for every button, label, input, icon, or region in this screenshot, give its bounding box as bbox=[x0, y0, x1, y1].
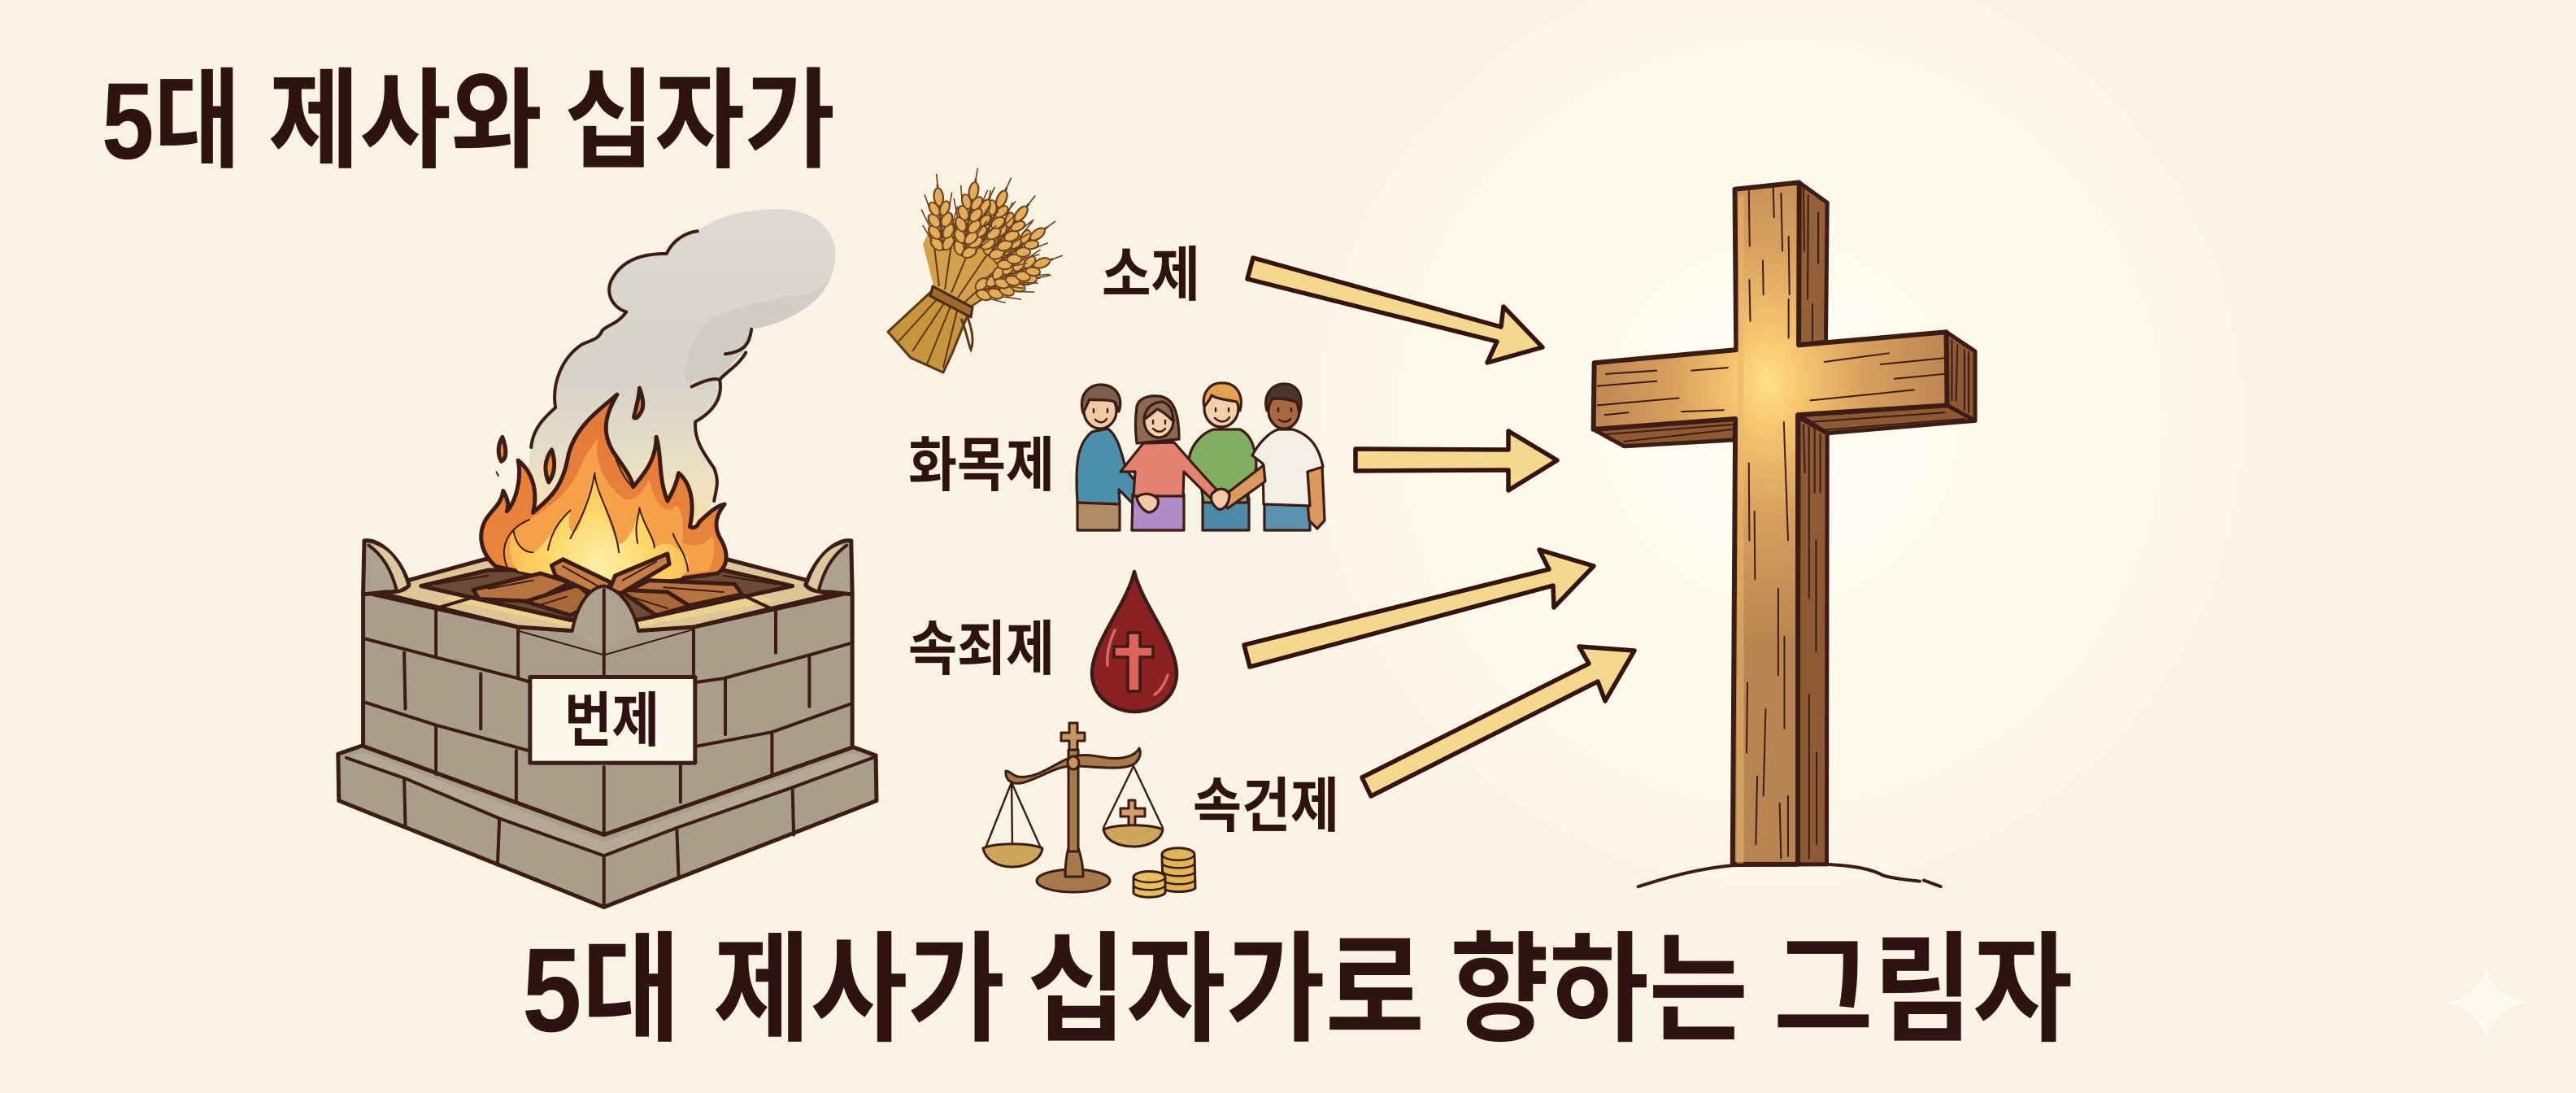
altar illustration: burnt offering bbox=[338, 209, 877, 907]
title: 십자가 bbox=[564, 61, 835, 182]
wheat tie bbox=[930, 286, 973, 317]
bottom caption: 제사가 bbox=[713, 924, 1005, 1057]
front face bbox=[1594, 182, 1947, 864]
title: 5대 bbox=[102, 61, 241, 182]
front horn bbox=[572, 586, 638, 653]
label: 속건제: 속건제 bbox=[1193, 773, 1339, 839]
arrow: 속죄제 to cross bbox=[1244, 550, 1594, 667]
ground line bbox=[1638, 864, 1941, 886]
wheat stems bbox=[888, 220, 1025, 372]
label box bbox=[530, 677, 695, 763]
wood grain lines bbox=[1598, 189, 1969, 859]
person 2 bbox=[1120, 396, 1218, 530]
base slab bbox=[338, 745, 877, 907]
bottom caption: 그림자 bbox=[1773, 924, 2073, 1057]
icon: balance scale with coins bbox=[983, 723, 1195, 897]
bottom caption bbox=[522, 924, 2073, 1057]
altar body bbox=[363, 592, 852, 834]
label: 속죄제: 속죄제 bbox=[908, 616, 1055, 682]
arrow: 속건제 to cross bbox=[1362, 647, 1634, 796]
label: 화목제: 화목제 bbox=[908, 433, 1055, 499]
altar rim and pit bbox=[371, 560, 846, 631]
coins bbox=[1134, 848, 1195, 897]
sparkle watermark bbox=[2446, 964, 2526, 1042]
label: 소제: 소제 bbox=[1102, 242, 1200, 308]
label: 번제: 번제 bbox=[564, 688, 659, 754]
scale right strings, pan, small cross bbox=[1103, 766, 1163, 847]
wheat ears bbox=[918, 165, 1068, 308]
altar horns left and right bbox=[363, 541, 852, 594]
scale left strings and pan bbox=[983, 782, 1042, 867]
right-side faces bbox=[1594, 182, 1975, 864]
scale base, pole, beam bbox=[1006, 723, 1140, 892]
bottom caption: 5대 bbox=[522, 924, 681, 1057]
fire bbox=[481, 388, 726, 590]
bottom caption: 향하는 bbox=[1450, 924, 1748, 1057]
title bbox=[102, 61, 835, 182]
bottom caption: 십자가로 bbox=[1027, 924, 1425, 1057]
icon: blood drop with cross bbox=[1092, 572, 1177, 712]
arrow: 소제 to cross bbox=[1247, 258, 1543, 363]
person 3 bbox=[1189, 383, 1256, 530]
icon: wheat sheaf bbox=[888, 165, 1068, 372]
person 1 bbox=[1077, 385, 1149, 530]
title: 제사와 bbox=[268, 61, 542, 182]
icon: four people joining hands bbox=[1077, 383, 1325, 530]
wood logs bbox=[473, 554, 742, 616]
person 4 bbox=[1221, 384, 1325, 530]
hand on waist bbox=[1137, 494, 1158, 512]
arrow: 화목제 to cross bbox=[1355, 431, 1557, 490]
joined hands bbox=[1211, 489, 1229, 509]
smoke bbox=[518, 209, 835, 543]
highlight edge bbox=[1737, 195, 1744, 864]
wooden cross bbox=[1594, 182, 1975, 886]
